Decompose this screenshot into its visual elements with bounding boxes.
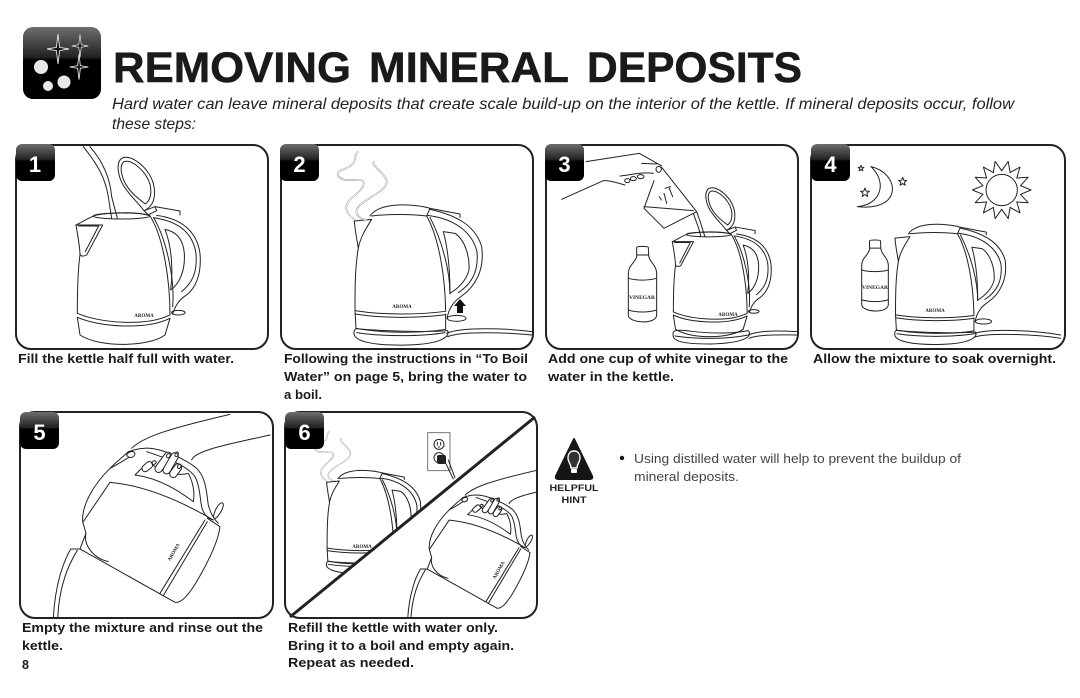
badge: step number 1 xyxy=(16,144,55,181)
panel: step 6 xyxy=(285,412,567,620)
bottle label: VINEGAR xyxy=(629,295,656,301)
panel: step 4 xyxy=(811,144,1065,349)
title xyxy=(113,44,802,92)
caption: step 5: kettle. xyxy=(22,639,63,653)
caption: step 3 xyxy=(547,352,788,384)
brand label: AROMA xyxy=(493,561,507,580)
icon: mineral deposits sparkle xyxy=(23,27,101,99)
caption: step 4: Allow the mixture to soak overnight. xyxy=(813,352,1056,366)
icon: sun xyxy=(972,160,1031,220)
illustration: pouring vinegar into kettle xyxy=(562,153,797,344)
page number: 8 xyxy=(22,658,29,672)
panel: step 1 xyxy=(16,144,268,349)
hint label: HINT xyxy=(562,495,587,506)
hint text: mineral deposits. xyxy=(634,469,739,484)
hint label: HELPFUL xyxy=(550,483,599,494)
badge: step number 2: 2 xyxy=(293,152,306,177)
steam xyxy=(338,152,387,220)
caption: step 3: Add one cup of white vinegar to the xyxy=(548,352,788,366)
brand label: AROMA xyxy=(392,305,412,310)
badge: step number 4 xyxy=(811,144,850,181)
badge: step number 6 xyxy=(285,412,324,449)
caption: step 6 xyxy=(288,621,514,670)
caption: step 3: water in the kettle. xyxy=(547,370,674,384)
bottle label: VINEGAR xyxy=(862,285,889,291)
illustration: emptying the kettle xyxy=(53,414,270,618)
intro text: these steps: xyxy=(112,116,196,133)
brand label: AROMA xyxy=(168,543,182,562)
badge: step number 6: 6 xyxy=(298,420,311,445)
hint label xyxy=(550,483,599,506)
illustration: kettle soaking overnight xyxy=(862,224,1061,344)
title: DEPOSITS xyxy=(587,44,802,92)
icon: moon and stars xyxy=(857,165,907,207)
pouring kettle xyxy=(407,470,536,617)
caption: step 5: Empty the mixture and rinse out the xyxy=(22,621,263,635)
panel: step 3 xyxy=(545,144,798,349)
hint text xyxy=(620,451,961,484)
wall outlet xyxy=(428,433,455,479)
intro text: Hard water can leave mineral deposits that create scale build-up on the interior of the kettle. If mineral deposits occur, follow xyxy=(112,96,1015,113)
title: REMOVING xyxy=(113,44,351,92)
caption: step 1: Fill the kettle half full with water. xyxy=(18,352,234,366)
caption: step 2: Following the instructions in “To Boil xyxy=(284,352,528,366)
illustration: refill, boil and empty kettle xyxy=(314,431,421,573)
caption: step 6: Repeat as needed. xyxy=(288,656,414,670)
caption: step 6: Bring it to a boil and empty again. xyxy=(288,639,514,653)
badge: step number 4: 4 xyxy=(824,152,837,177)
caption: step 2: Water” on page 5, bring the water to xyxy=(284,370,527,384)
brand label: AROMA xyxy=(925,309,945,314)
badge: step number 3 xyxy=(545,144,584,181)
badge: step number 3: 3 xyxy=(558,152,571,177)
caption: step 2 xyxy=(284,352,528,402)
badge: step number 5 xyxy=(20,412,59,449)
plug xyxy=(437,455,446,464)
illustration: kettle being filled with water xyxy=(76,147,200,344)
badge: step number 2 xyxy=(280,144,319,181)
caption: step 6: Refill the kettle with water only. xyxy=(288,621,498,635)
hint text: Using distilled water will help to prevent the buildup of xyxy=(634,451,961,466)
caption: step 5 xyxy=(22,621,263,653)
brand label: AROMA xyxy=(352,545,372,550)
icon: helpful hint bulb xyxy=(556,439,592,479)
panel: step 5 xyxy=(20,412,273,618)
illustration: kettle boiling with steam xyxy=(354,205,532,345)
brand label: AROMA xyxy=(134,314,154,319)
diagonal divider xyxy=(290,417,535,617)
intro text xyxy=(112,96,1015,133)
badge: step number 5: 5 xyxy=(33,420,46,445)
panel: step 2 xyxy=(280,144,533,349)
brand label: AROMA xyxy=(718,313,738,318)
arrow: switch up xyxy=(454,299,466,313)
title: MINERAL xyxy=(369,44,569,92)
badge: step number 1: 1 xyxy=(29,152,41,177)
caption: step 2: a boil. xyxy=(284,388,322,402)
